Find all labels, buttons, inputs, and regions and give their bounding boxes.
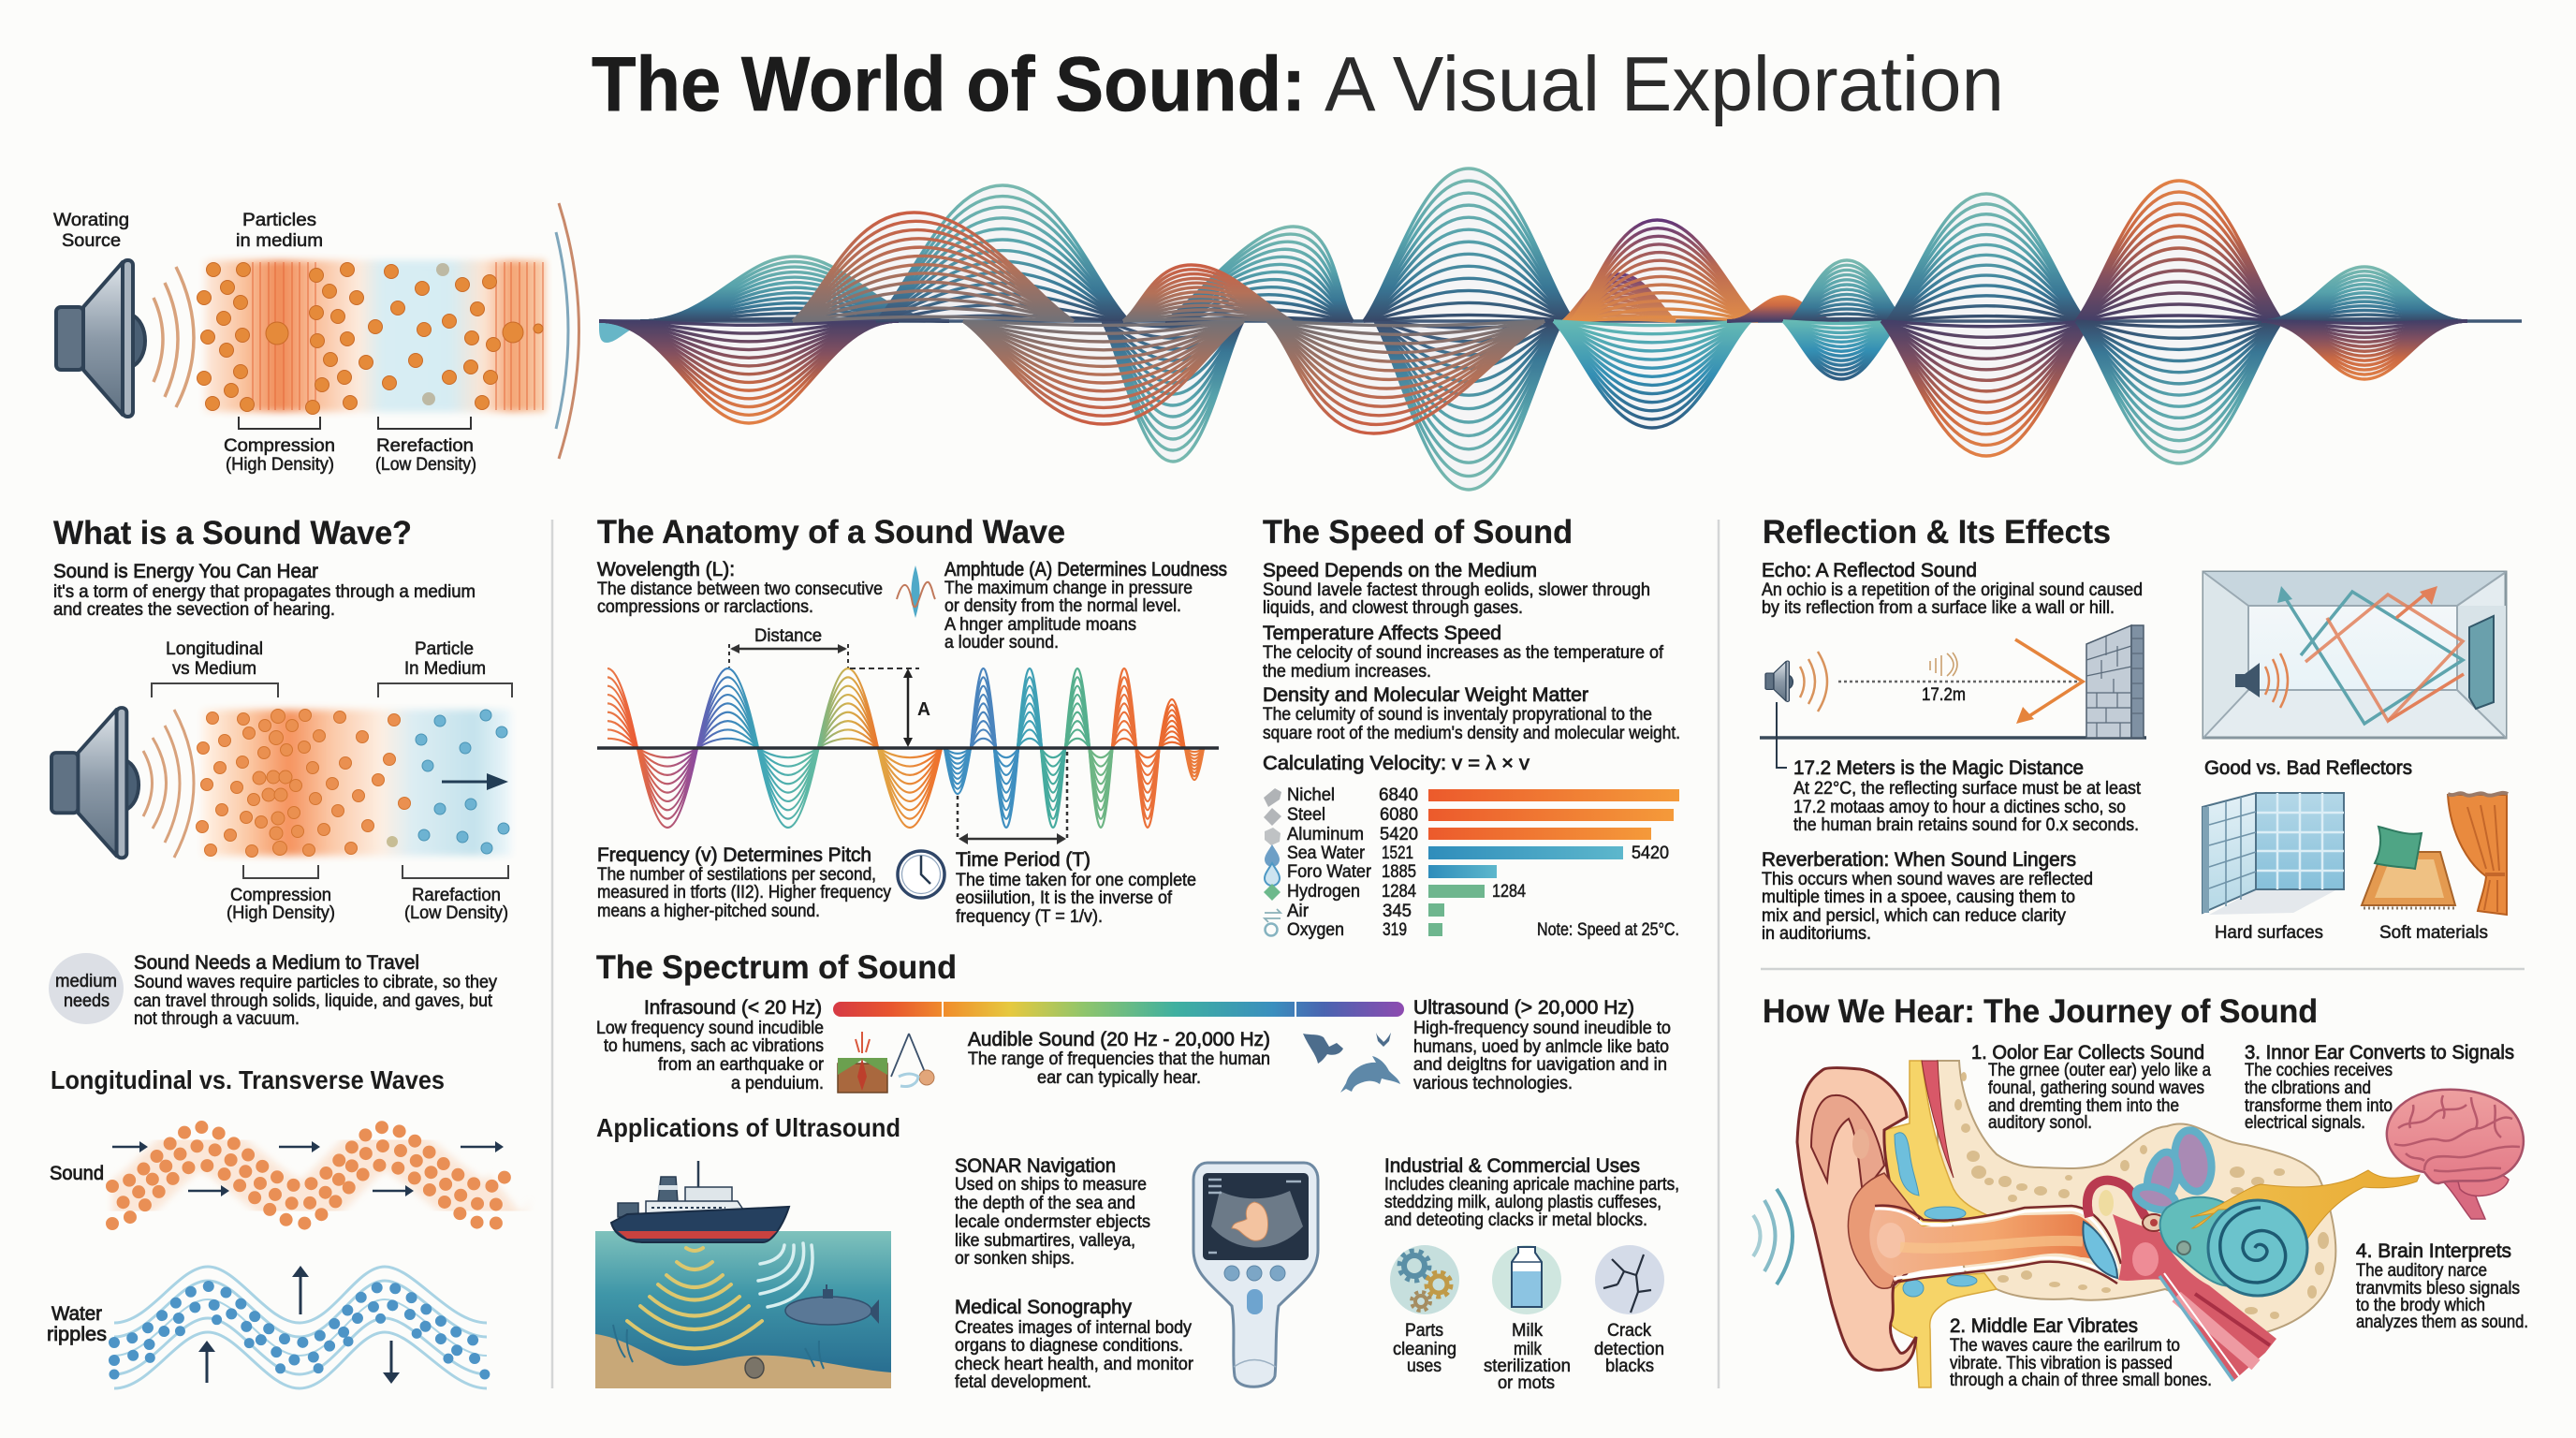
label: particles in medium: Particles — [242, 211, 316, 230]
label: milk sterilization: sterilization — [1484, 1357, 1571, 1376]
icon: speaker — [51, 708, 139, 858]
icon: clock — [898, 851, 944, 898]
divider: column 3 — [1718, 520, 1720, 1388]
label: particle in medium: In Medium — [404, 659, 486, 679]
chart names: Air — [1287, 902, 1310, 921]
label: milk sterilization — [1484, 1321, 1571, 1393]
label: rarefaction — [404, 886, 508, 923]
text block: step 3: the clbrations and — [2245, 1078, 2371, 1098]
text block: needs a medium — [134, 952, 497, 1029]
chart names: Foro Water — [1287, 862, 1372, 882]
icon: medium needs bubble — [49, 953, 124, 1024]
label: longitudinal vs medium: Longitudinal — [166, 639, 263, 659]
text block: needs a medium: not through a vacuum. — [134, 1009, 300, 1029]
text block: sonar: or sonken ships. — [955, 1249, 1075, 1269]
label: hard surfaces: Hard surfaces — [2215, 923, 2323, 943]
text block: medical: organs to diagnese conditions. — [955, 1336, 1183, 1356]
cochlea — [2208, 1200, 2307, 1296]
text block: density: square root of the medium's density and molecular weight. — [1263, 724, 1680, 743]
text block: step 1: auditory sonol. — [1988, 1113, 2092, 1133]
text block: needs a medium: Sound waves require particles to cibrate, so they — [134, 973, 497, 992]
text block: step 2: through a chain of three small bones. — [1950, 1371, 2212, 1390]
text block: needs a medium: Sound Needs a Medium to Travel — [134, 952, 419, 974]
text block: magic distance: 17.2 Meters is the Magic Distance — [1793, 757, 2084, 779]
illustration: ear anatomy — [1797, 1061, 2420, 1387]
text block: infrasound: a penduium. — [731, 1074, 824, 1093]
text block: ultrasound: humans, uoed by anlmcle like bato — [1413, 1037, 1669, 1057]
text block: energy: it's a torm of energy that propagates through a medium — [53, 582, 476, 602]
label: parts cleaning: Parts — [1405, 1321, 1443, 1341]
text block: amplitude: A hnger amplitude moans — [944, 615, 1136, 635]
chart values: 319 — [1383, 920, 1407, 940]
panel: reflection and its effects — [1760, 514, 2508, 944]
pinna — [1797, 1068, 1919, 1371]
illustration: rug and pillow — [2362, 827, 2455, 908]
text block: wavelength: The distance between two consecutive — [597, 580, 883, 599]
text block: step 3: The cochies receives — [2245, 1061, 2393, 1080]
text block: time period: The time taken for one complete — [956, 871, 1196, 890]
label: vibrating source: Source — [62, 231, 121, 251]
heading: How We Hear: The Journey of Sound — [1763, 993, 2318, 1030]
vestibule — [2160, 1197, 2242, 1286]
spectrum bar — [833, 1001, 1404, 1018]
text block: industrial: Includes cleaning apricale machine parts, — [1384, 1175, 1679, 1195]
text block: step 3: electrical signals. — [2245, 1113, 2365, 1133]
text block: ultrasound: Ultrasound (> 20,000 Hz) — [1413, 997, 1634, 1019]
heading: The Anatomy of a Sound Wave — [597, 514, 1065, 550]
text block: energy: and creates the sevection of hearing. — [53, 600, 335, 620]
diagram: echo wall: 17.2m — [1922, 685, 1966, 705]
label: particles in medium — [236, 211, 323, 251]
text block: sonar: lecale ondermster ebjects — [955, 1212, 1150, 1232]
text block: time period — [956, 849, 1196, 927]
text block: step 4 — [2356, 1240, 2528, 1332]
text block: magic distance: the human brain retains sound for 0.x seconds. — [1793, 815, 2139, 835]
arrow: distance — [729, 644, 848, 668]
text block: energy — [53, 561, 476, 620]
label: parts cleaning — [1393, 1321, 1456, 1376]
label: water ripples: Water — [51, 1303, 102, 1325]
label: rarefaction: (Low Density) — [375, 455, 476, 475]
icon: speaker — [56, 260, 145, 417]
heading: longitudinal vs transverse: Longitudinal vs. Transverse Waves — [51, 1065, 445, 1094]
text block: wavelength: Wovelength (L): — [597, 559, 735, 580]
label: particle in medium — [404, 639, 486, 679]
sine wave chart — [578, 668, 1219, 828]
label: rarefaction: (Low Density) — [404, 903, 508, 923]
text block: medical: check heart health, and monitor — [955, 1355, 1194, 1374]
label: soft materials: Soft materials — [2379, 923, 2488, 943]
panel: anatomy of a sound wave — [578, 514, 1227, 927]
hero: particle compression diagram — [53, 203, 578, 475]
text block: reverberation: This occurs when sound waves are reflected — [1762, 870, 2093, 889]
text block: echo: Echo: A Reflectod Sound — [1762, 560, 1977, 581]
chart values: 5420 — [1632, 844, 1669, 863]
label: parts cleaning: cleaning — [1393, 1340, 1456, 1359]
callout line — [1777, 702, 1787, 768]
text block: time period: frequency (T = 1/v). — [956, 907, 1103, 927]
chart bars — [1428, 789, 1679, 936]
label: good vs bad reflectors: Good vs. Bad Reflectors — [2204, 757, 2412, 779]
text block: infrasound: from an earthquake or — [658, 1055, 825, 1075]
icon: dolphin — [1340, 1056, 1400, 1093]
text block: infrasound: to humens, sach ac vibrations — [604, 1036, 824, 1056]
label: distance: Distance — [754, 626, 822, 646]
icon: medium needs bubble: medium — [55, 972, 117, 991]
label: longitudinal vs medium: vs Medium — [172, 659, 256, 679]
hero: multicolour waveform — [599, 169, 2522, 490]
text block: step 1: founal, gathering sound waves — [1988, 1078, 2204, 1098]
chart values: 1885 — [1382, 862, 1416, 882]
label: milk sterilization: Milk — [1512, 1321, 1543, 1341]
label: compression: (High Density) — [227, 903, 335, 923]
illustration: curtain — [2448, 793, 2508, 915]
text block: sonar: SONAR Navigation — [955, 1155, 1116, 1177]
text block: step 4: 4. Brain Interprets — [2356, 1240, 2511, 1262]
text block: frequency: The number of sestilations per second, — [597, 865, 876, 885]
divider: right column — [1761, 968, 2525, 970]
chart values: 1521 — [1382, 844, 1413, 863]
label: crack detection: Crack — [1607, 1321, 1651, 1341]
text block: medical: Creates images of internal body — [955, 1318, 1192, 1338]
chart names: Aluminum — [1287, 825, 1364, 844]
chart names: Sea Water — [1287, 844, 1366, 863]
icon: medium needs bubble: needs — [64, 991, 110, 1011]
chart values: 1284 — [1492, 882, 1526, 902]
text block: audible — [968, 1029, 1270, 1088]
label: rarefaction: Rarefaction — [412, 886, 501, 905]
arrow: time period — [958, 752, 1067, 844]
text block: medical — [955, 1297, 1194, 1392]
text block: density: Density and Molecular Weight Matter — [1263, 684, 1588, 706]
text block: temperature: The celocity of sound increases as the temperature of — [1263, 643, 1664, 663]
label: water ripples: ripples — [47, 1324, 107, 1345]
heading: Reflection & Its Effects — [1763, 514, 2111, 550]
text block: step 4: analyzes them as sound. — [2356, 1313, 2528, 1332]
text block: step 3: 3. Innor Ear Converts to Signals — [2245, 1042, 2514, 1064]
arrow: amplitude A: A — [917, 699, 930, 720]
label: compression — [224, 436, 335, 475]
title: The World of Sound: — [592, 40, 1306, 127]
illustration: tiled hard surface — [2203, 793, 2344, 915]
chart values: 5420 — [1380, 825, 1418, 844]
panel: applications of ultrasound — [595, 1113, 1679, 1393]
text block: sonar: like submartires, valleya, — [955, 1231, 1135, 1251]
label: milk sterilization: milk — [1514, 1340, 1542, 1359]
label: compression: Compression — [224, 436, 335, 456]
label: parts cleaning: uses — [1407, 1357, 1442, 1376]
formula: Calculating Velocity: v = λ × v — [1263, 753, 1530, 774]
panel: speed of sound — [1263, 514, 1680, 940]
chart names: Oxygen — [1287, 920, 1344, 940]
text block: infrasound: Low frequency sound incudible — [596, 1019, 824, 1038]
icon: milk carton — [1492, 1245, 1561, 1314]
text block: step 2: vibrate. This vibration is passed — [1950, 1354, 2173, 1373]
chart names: Hydrogen — [1287, 882, 1360, 902]
text block: infrasound — [596, 997, 825, 1093]
text block: temperature: the medium increases. — [1263, 662, 1431, 682]
panel: what is a sound wave — [47, 515, 512, 1388]
icon: bat — [1303, 1033, 1391, 1064]
text block: audible: ear can typically hear. — [1037, 1068, 1201, 1088]
particle band — [197, 260, 546, 414]
label: vibrating source: Worating — [53, 211, 129, 230]
text block: reverberation: multiple times in a spoee, causing them to — [1762, 888, 2075, 907]
chart values: 1284 — [1382, 882, 1416, 902]
label: rarefaction — [375, 436, 476, 475]
auditory nerve — [2190, 1170, 2420, 1245]
eardrum — [2083, 1222, 2117, 1278]
text block: amplitude — [944, 559, 1227, 653]
text block: medium: Speed Depends on the Medium — [1263, 560, 1537, 581]
text block: time period: Time Period (T) — [956, 849, 1090, 871]
text block: time period: eosiilution, It is the inverse of — [956, 888, 1173, 908]
text block: step 1 — [1971, 1042, 2211, 1133]
text block: amplitude: or density from the normal level. — [944, 596, 1181, 616]
text block: step 3: transforme them into — [2245, 1096, 2393, 1116]
cartilage tissue — [1884, 1061, 1987, 1226]
text block: density: The celumity of sound is inventaly propyrational to the — [1263, 705, 1652, 725]
label: rarefaction: Rerefaction — [376, 436, 474, 456]
chart names: Steel — [1287, 805, 1325, 825]
ear canal — [1869, 1210, 2115, 1276]
text block: reverberation: in auditoriums. — [1762, 924, 1871, 944]
text block: frequency — [597, 844, 891, 921]
text block: amplitude: The maximum change in pressure — [944, 579, 1193, 598]
label: longitudinal vs medium — [166, 639, 263, 679]
label: compression: Compression — [230, 886, 331, 905]
label: crack detection: blacks — [1605, 1357, 1654, 1376]
label: water ripples — [47, 1303, 107, 1345]
chart names — [1287, 785, 1372, 940]
text block: frequency: measured in tforts (II2). Higher frequency — [597, 883, 891, 902]
text block: echo: An ochio is a repetition of the original sound caused — [1762, 580, 2143, 600]
text block: step 2: The waves caure the earilrum to — [1950, 1336, 2180, 1356]
label: compression — [227, 886, 335, 923]
label: vibrating source — [53, 211, 129, 251]
text block: medium: Sound Iavele factest through eolids, slower through — [1263, 580, 1650, 600]
diagram: echo wall — [1760, 625, 2146, 738]
text block: audible: The range of frequencies that the human — [968, 1049, 1270, 1069]
text block: wavelength — [597, 559, 883, 617]
text block: step 4: to the brody which — [2356, 1296, 2485, 1315]
text block: step 2: 2. Middle Ear Vibrates — [1950, 1315, 2138, 1337]
chart note: Note: Speed at 25°C. — [1537, 920, 1679, 940]
particle band with compression and rarefaction — [197, 710, 511, 858]
illustration: brain — [2387, 1090, 2524, 1219]
text block: step 3 — [2245, 1042, 2514, 1133]
text block: infrasound: Infrasound (< 20 Hz) — [644, 997, 822, 1019]
top brackets — [152, 683, 512, 697]
semicircular canals — [2133, 1127, 2216, 1214]
text block: ultrasound — [1413, 997, 1671, 1093]
text block: magic distance: At 22°C, the reflecting surface must be at least — [1793, 779, 2142, 799]
text block: medical: Medical Sonography — [955, 1297, 1132, 1318]
label: particles in medium: in medium — [236, 231, 323, 251]
text block: reverberation: Reverberation: When Sound Lingers — [1762, 849, 2076, 871]
text block: sonar — [955, 1155, 1150, 1269]
label: particle in medium: Particle — [415, 639, 474, 659]
label: crack detection: detection — [1594, 1340, 1664, 1359]
text block: echo: by its reflection from a surface like a wall or hill. — [1762, 598, 2115, 618]
text block: energy: Sound is Energy You Can Hear — [53, 561, 318, 582]
text block: medium: liquids, and clowest through gases. — [1263, 598, 1523, 618]
text block: density — [1263, 684, 1680, 743]
text block: step 4: tranvmits bleso signals — [2356, 1279, 2520, 1299]
chart values: 6840 — [1379, 785, 1418, 805]
text block: temperature — [1263, 623, 1664, 682]
text block: reverberation — [1762, 849, 2093, 944]
chart names: Nichel — [1287, 785, 1335, 805]
middle ear and tube — [2113, 1214, 2276, 1381]
text block: ultrasound: various technologies. — [1413, 1074, 1573, 1093]
text block: magic distance: 17.2 motaas amoy to hour a dictines scho, so — [1793, 798, 2126, 817]
title — [592, 40, 2004, 127]
icon: earthquake — [838, 1032, 887, 1093]
icon: gears — [1390, 1245, 1459, 1314]
text block: amplitude: Amphtude (A) Determines Loudness — [944, 559, 1227, 580]
text block: amplitude: a louder sound. — [944, 633, 1059, 653]
illustration: reverberant room — [2203, 572, 2506, 738]
text block: step 1: The grnee (outer ear) yelo like a — [1988, 1061, 2211, 1080]
chart values: 6080 — [1380, 805, 1418, 825]
sound arcs — [143, 710, 194, 858]
text block: industrial — [1384, 1155, 1679, 1230]
divider: column 1 — [551, 520, 553, 1388]
text block: frequency: means a higher-pitched sound. — [597, 902, 820, 921]
bottom brackets — [243, 865, 508, 878]
temporal bone — [1938, 1061, 2335, 1332]
icon: crack — [1595, 1245, 1664, 1314]
heading: The Spectrum of Sound — [596, 949, 957, 986]
text block: ultrasound: and deigltns for uavigation and in — [1413, 1055, 1667, 1075]
text block: step 4: The auditory narce — [2356, 1261, 2487, 1281]
arrow: amplitude A — [850, 668, 930, 747]
text block: sonar: the depth of the sea and — [955, 1194, 1135, 1213]
panel: spectrum of sound — [596, 949, 1671, 1093]
sound arcs from speaker — [154, 267, 194, 407]
label: compression: (High Density) — [226, 455, 334, 475]
heading: What is a Sound Wave? — [53, 515, 412, 551]
illustration: sonar ship and sea — [595, 1161, 891, 1388]
text block: medium — [1263, 560, 1650, 618]
bar chart: speed by medium — [1264, 785, 1679, 940]
text block: audible: Audible Sound (20 Hz - 20,000 Hz) — [968, 1029, 1270, 1050]
outgoing arcs — [556, 203, 578, 459]
text block: step 1: and dremting them into the — [1988, 1096, 2179, 1116]
chart values — [1379, 785, 1669, 940]
brackets — [239, 417, 471, 429]
diagram: transverse water ripple — [114, 1266, 487, 1388]
label: milk sterilization: or mots — [1498, 1373, 1555, 1393]
text block: industrial: Industrial & Commercial Uses — [1384, 1155, 1640, 1177]
text block: industrial: steddzing milk, aulong plastis cuffeses, — [1384, 1193, 1661, 1212]
text block: medical: fetal development. — [955, 1372, 1091, 1392]
text block: needs a medium: can travel through solids, liquide, and gaves, but — [134, 991, 493, 1011]
panel: how we hear — [1753, 993, 2528, 1390]
heading: Applications of Ultrasound — [596, 1113, 900, 1142]
illustration: ultrasound device — [1193, 1163, 1318, 1387]
label: sound: Sound — [50, 1163, 104, 1184]
icon: amplitude — [897, 565, 935, 618]
text block: temperature: Temperature Affects Speed — [1263, 623, 1501, 644]
heading: The Speed of Sound — [1263, 514, 1573, 550]
text block: echo — [1762, 560, 2143, 618]
text block: reverberation: mix and persicl, which can reduce clarity — [1762, 906, 2066, 926]
title: A Visual Exploration — [1325, 40, 2004, 127]
text block: frequency: Frequency (v) Determines Pitch — [597, 844, 871, 866]
text block: magic distance — [1793, 757, 2142, 835]
chart values: 345 — [1383, 902, 1412, 921]
label: crack detection — [1594, 1321, 1664, 1376]
text block: ultrasound: High-frequency sound ineudible to — [1413, 1019, 1671, 1038]
text block: step 2 — [1950, 1315, 2212, 1390]
icon: incoming sound arcs — [1753, 1189, 1793, 1284]
text block: industrial: and deteoting clacks ir metal blocks. — [1384, 1211, 1647, 1230]
diagram: longitudinal wave particles — [112, 1127, 505, 1224]
icon: pendulum — [891, 1034, 934, 1087]
text block: wavelength: compressions or rarclactions. — [597, 597, 813, 617]
text block: sonar: Used on ships to measure — [955, 1175, 1147, 1195]
chart icons — [1264, 788, 1281, 936]
text block: step 1: 1. Oolor Ear Collects Sound — [1971, 1042, 2204, 1064]
